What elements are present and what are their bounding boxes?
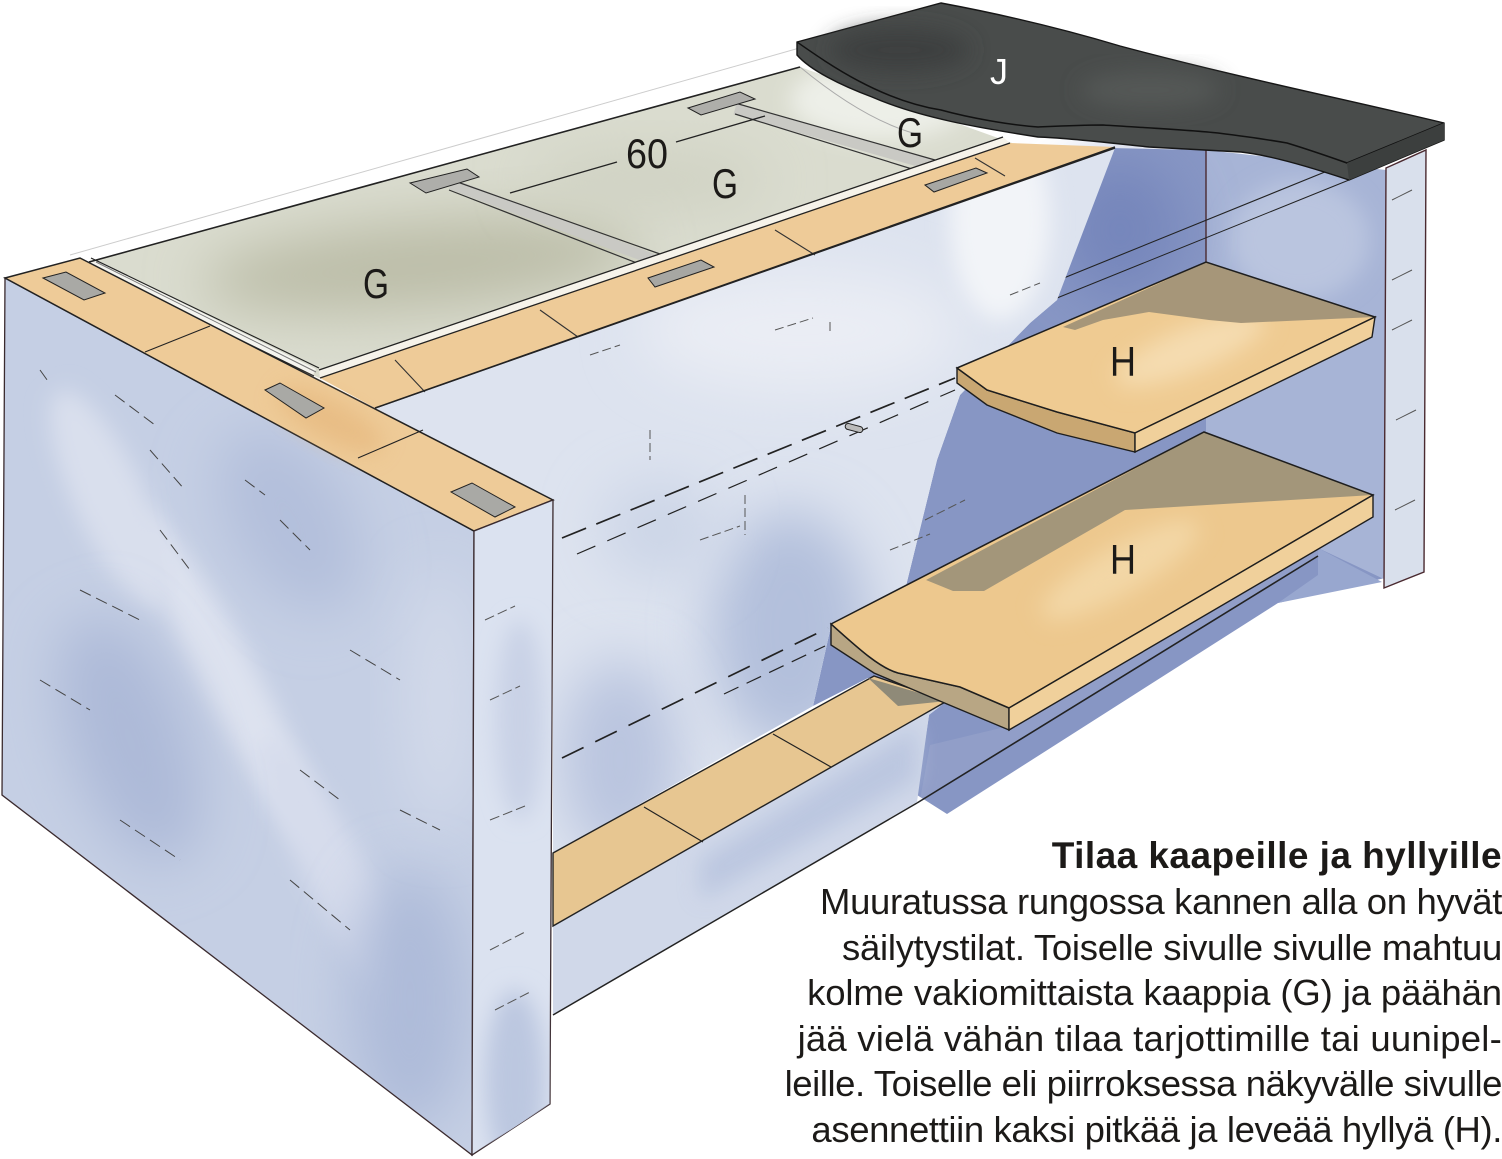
pin — [845, 423, 863, 433]
countertop J — [797, 3, 1444, 180]
label: 60: 60 — [626, 130, 668, 177]
caption text block: Muuratussa rungossa kannen alla on hyvät — [820, 881, 1502, 922]
band plates — [43, 272, 105, 300]
caption text block: säilytystilat. Toiselle sivulle sivulle mahtuu — [842, 927, 1502, 968]
back interior wall — [813, 148, 1386, 814]
caption text block: jää vielä vähän tilaa tarjottimille tai uunipel- — [798, 1018, 1502, 1059]
end wall top band — [5, 258, 553, 531]
label: G left: G — [363, 260, 389, 307]
dashed cabinet lines — [562, 378, 955, 758]
band plates — [648, 260, 714, 287]
caption text block: leille. Toiselle eli piirroksessa näkyvälle sivulle — [785, 1063, 1502, 1104]
label: G middle: G — [712, 160, 738, 207]
shelf upper H — [957, 262, 1375, 452]
lower ledge — [553, 676, 947, 926]
label: G right: G — [897, 109, 923, 156]
shelf lower H — [831, 432, 1373, 730]
long side wall — [375, 120, 1115, 860]
panel: top opening with cabinets — [70, 45, 1012, 378]
caption text block: asennettiin kaksi pitkää ja leveää hyllyä (H). — [811, 1109, 1502, 1150]
label: J: J — [990, 51, 1008, 92]
right pillar — [1384, 150, 1426, 588]
corner pillar — [472, 500, 553, 1159]
top band of long wall — [319, 137, 1115, 408]
label: H lower: H — [1110, 536, 1136, 583]
cabinet divider strips — [85, 103, 935, 376]
end wall face — [2, 278, 475, 1155]
caption heading: Tilaa kaapeille ja hyllyille — [1052, 835, 1502, 876]
caption text block — [785, 835, 1502, 1150]
dimension line — [510, 116, 765, 193]
top plates — [410, 169, 479, 193]
caption text block: kolme vakiomittaista kaappia (G) ja päähän — [807, 972, 1502, 1013]
label: H upper: H — [1110, 338, 1136, 385]
wall plinth below ledge — [553, 701, 947, 1015]
